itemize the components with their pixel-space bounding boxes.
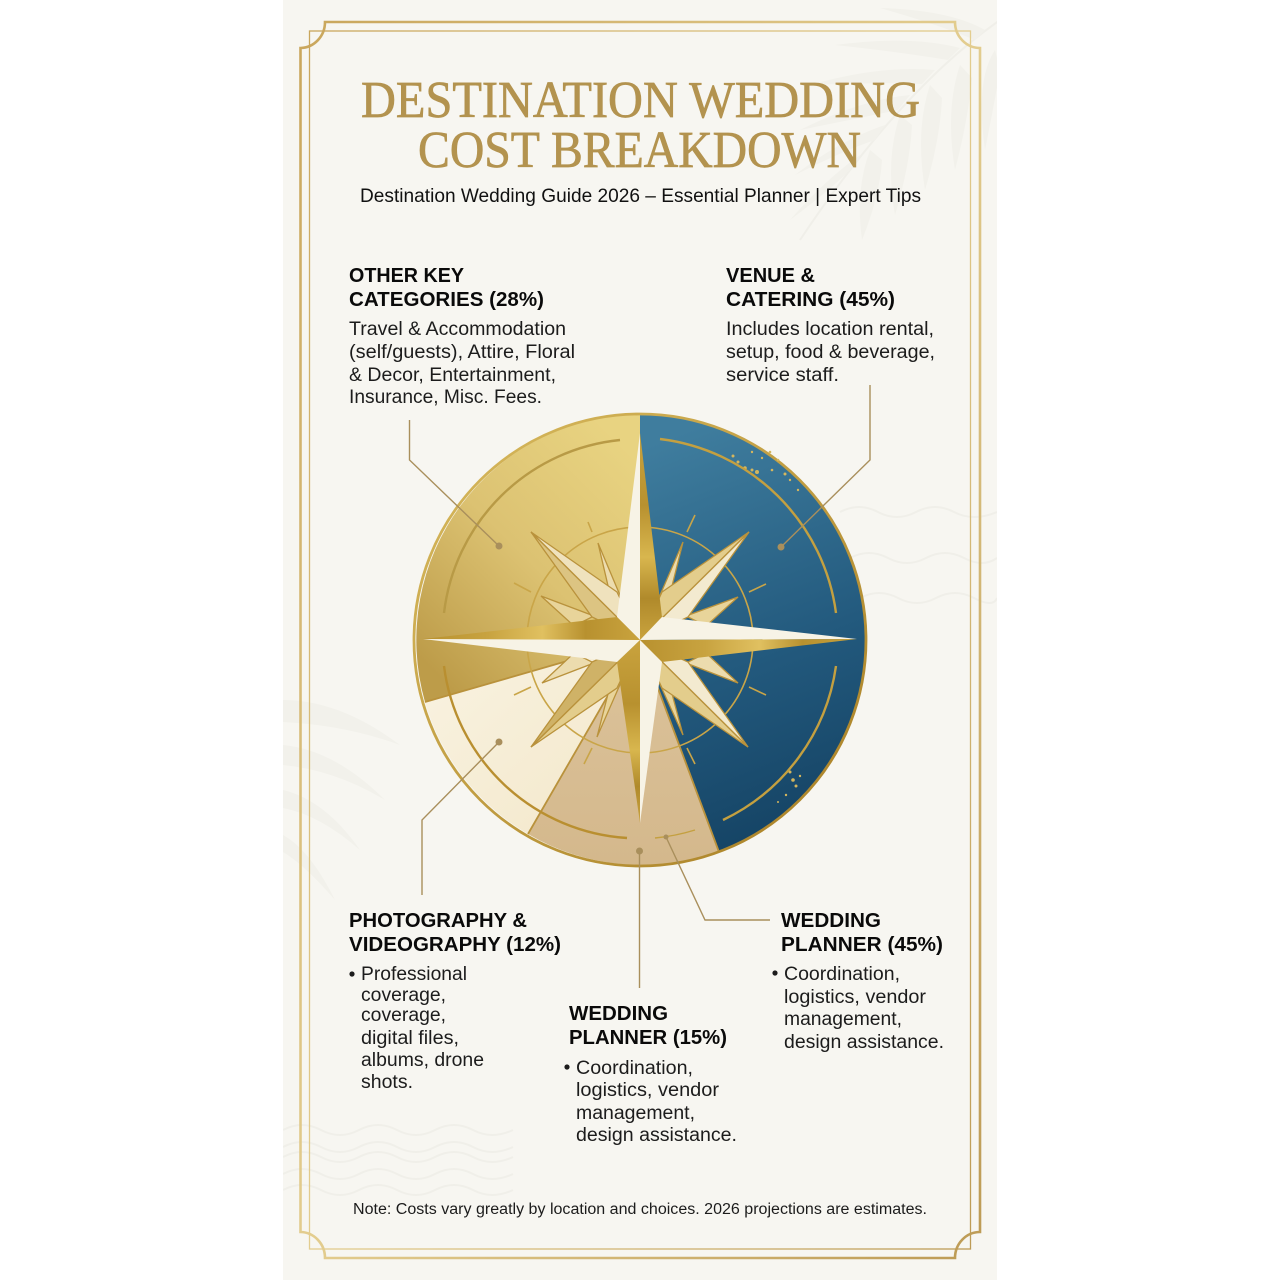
- subtitle: Destination Wedding Guide 2026 – Essential Planner | Expert Tips: [360, 185, 921, 207]
- panel: other key categories: (self/guests), Attire, Floral: [349, 342, 575, 363]
- title: [361, 72, 920, 179]
- panel: wedding planner 15%: Coordination,: [576, 1058, 693, 1079]
- panel: other key categories: CATEGORIES (28%): [349, 288, 544, 311]
- panel: other key categories: Travel & Accommodation: [349, 319, 566, 340]
- panel: other key categories: & Decor, Entertainment,: [349, 365, 556, 386]
- panel: photography and videography: [349, 909, 561, 1093]
- segment: other key categories, gold: [416, 414, 640, 702]
- panel: wedding planner 45%: WEDDING: [781, 909, 881, 932]
- title: DESTINATION WEDDING: [361, 72, 920, 129]
- panel: photography and videography: PHOTOGRAPHY &: [349, 909, 527, 932]
- segment: venue and catering, blue: [640, 414, 867, 852]
- panel: venue and catering: CATERING (45%): [726, 288, 895, 311]
- panel: venue and catering: [726, 264, 935, 386]
- panel: photography and videography: albums, drone: [361, 1050, 484, 1071]
- decorative palm and wave background: [283, 8, 1000, 1195]
- panel: photography and videography: VIDEOGRAPHY (12%): [349, 933, 561, 956]
- panel: wedding planner 15%: WEDDING: [569, 1002, 668, 1025]
- leader line: wedding planner 45%: [664, 834, 770, 920]
- panel: photography and videography: Professional: [361, 964, 467, 985]
- segment: wedding planner, beige: [528, 640, 719, 865]
- segment: photography, cream: [425, 640, 640, 834]
- panel: photography and videography: coverage,: [361, 985, 446, 1006]
- panel: other key categories: Insurance, Misc. Fees.: [349, 387, 542, 408]
- small rays: [541, 542, 738, 737]
- panel: wedding planner 45%: [772, 909, 944, 1053]
- panel: wedding planner 15%: management,: [576, 1103, 695, 1124]
- panel: wedding planner 45%: design assistance.: [784, 1032, 944, 1053]
- page background: [283, 0, 997, 1280]
- panel: photography and videography: shots.: [361, 1072, 413, 1093]
- title: COST BREAKDOWN: [418, 122, 861, 179]
- leader line: other key categories: [410, 420, 502, 550]
- panel: photography and videography: coverage,: [361, 1005, 446, 1026]
- panel: photography and videography: digital files,: [361, 1028, 459, 1049]
- panel: wedding planner 15%: [564, 1002, 737, 1146]
- panel: wedding planner 15%: PLANNER (15%): [569, 1026, 727, 1049]
- panel: wedding planner 45%: management,: [784, 1009, 902, 1030]
- panel: venue and catering: VENUE &: [726, 264, 815, 287]
- leader line: wedding planner 15%: [636, 848, 643, 988]
- outer arcs: [444, 439, 836, 838]
- ornate gold frame: [300, 22, 980, 1258]
- leader line: venue and catering: [778, 385, 870, 550]
- panel: wedding planner 45%: logistics, vendor: [784, 987, 927, 1008]
- compass star: [423, 433, 857, 823]
- panel: wedding planner 15%: design assistance.: [576, 1125, 737, 1146]
- footnote: Note: Costs vary greatly by location and choices. 2026 projections are estimates.: [353, 1201, 927, 1218]
- inner ring and ticks: [514, 515, 766, 764]
- panel: other key categories: OTHER KEY: [349, 264, 464, 287]
- compass pie chart: [414, 414, 867, 866]
- panel: wedding planner 15%: logistics, vendor: [576, 1080, 720, 1101]
- panel: wedding planner 45%: Coordination,: [784, 964, 900, 985]
- segment dividers and rim: [414, 414, 866, 866]
- gold speckle on blue: [732, 451, 801, 803]
- panel: other key categories: [349, 264, 575, 408]
- diagonal rays: [531, 532, 749, 747]
- panel: venue and catering: service staff.: [726, 365, 839, 386]
- panel: venue and catering: setup, food & beverage,: [726, 342, 935, 363]
- leader line: photography: [422, 738, 502, 895]
- main star points: [423, 433, 857, 823]
- panel: venue and catering: Includes location rental,: [726, 319, 934, 340]
- panel: wedding planner 45%: PLANNER (45%): [781, 933, 943, 956]
